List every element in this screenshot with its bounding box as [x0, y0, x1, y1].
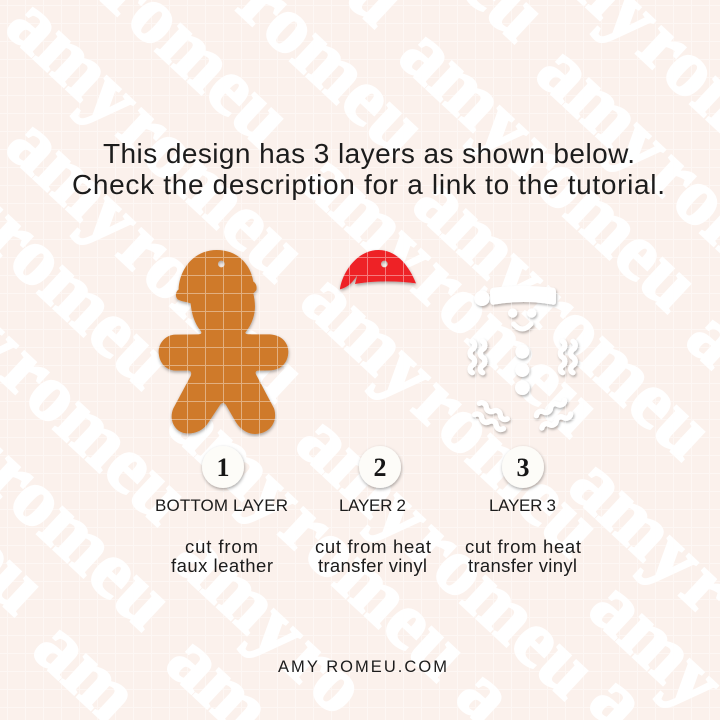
background watermark: amy romeu: amy romeu [153, 378, 486, 697]
background watermark: amy romeu: amy romeu [286, 254, 619, 573]
number badge 3: 3 [516, 453, 530, 482]
label: layer 3: LAYER 3 [489, 496, 556, 515]
arm and leg squiggles [470, 341, 575, 431]
face [508, 308, 536, 329]
description: heat transfer vinyl: cut from heat [465, 536, 581, 557]
description: faux leather [171, 536, 273, 576]
heading: This design has 3 layers as shown below. [103, 138, 635, 169]
background watermark: amy romeu: amy romeu [0, 99, 324, 418]
background watermark: amy romeu: amy romeu [281, 396, 614, 715]
column 1: bottom layer [155, 446, 288, 576]
description: heat transfer vinyl: cut from heat [315, 536, 431, 557]
description: faux leather: cut from [185, 536, 258, 557]
heading [72, 138, 665, 200]
background watermark: amy romeu: amy romeu [286, 134, 619, 453]
column 3: layer 3 [465, 446, 581, 576]
layer 1: gingerbread body [159, 250, 288, 434]
label: bottom layer: BOTTOM LAYER [155, 496, 288, 515]
layer 2: red hat [340, 250, 416, 289]
description: heat transfer vinyl: transfer vinyl [318, 555, 427, 576]
description: heat transfer vinyl: transfer vinyl [468, 555, 577, 576]
description: heat transfer vinyl [465, 536, 581, 576]
description: faux leather: faux leather [171, 555, 273, 576]
footer website: AMY ROMEU.COM [278, 658, 447, 676]
number badge 1: 1 [216, 453, 230, 482]
layer 3: white decorations [470, 286, 575, 431]
background watermark: amy romeu: amy romeu [384, 9, 717, 328]
hat pompom and brim [474, 286, 556, 306]
heading: Check the description for a link to the tutorial. [72, 169, 665, 200]
description: heat transfer vinyl [315, 536, 431, 576]
label: layer 2: LAYER 2 [339, 496, 406, 515]
buttons [515, 345, 530, 395]
number badge 2: 2 [374, 453, 386, 482]
column 2: layer 2 [315, 446, 431, 576]
